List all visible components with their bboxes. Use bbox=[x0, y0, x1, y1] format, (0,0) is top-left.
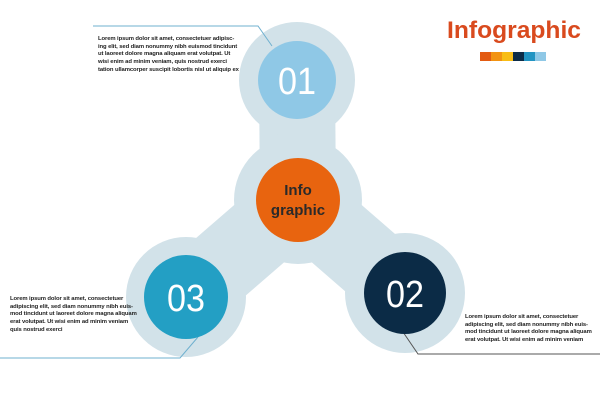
text block 03 bbox=[10, 296, 137, 333]
text block 03: erat volutpat. Ut wisi enim ad minim veniam bbox=[10, 319, 128, 325]
circle 03: 03 bbox=[167, 278, 205, 320]
text block 01: Lorem ipsum dolor sit amet, consectetuer adipisc- bbox=[98, 36, 234, 42]
center circle: graphic bbox=[271, 202, 325, 219]
text block 02: adipiscing elit, sed diam nonummy nibh euis- bbox=[465, 322, 588, 328]
text block 03: Lorem ipsum dolor sit amet, consectetuer bbox=[10, 296, 123, 302]
text block 03: adipiscing elit, sed diam nonummy nibh euis- bbox=[10, 304, 133, 310]
text block 01: wisi enim ad minim veniam, quis nostrud exerci bbox=[98, 59, 227, 65]
text block 02: erat volutpat. Ut wisi enim ad minim veniam bbox=[465, 337, 583, 343]
title: Infographic bbox=[447, 17, 581, 44]
center circle: Info bbox=[284, 182, 312, 199]
circle 02 bbox=[364, 252, 446, 334]
text block 02: mod tincidunt ut laoreet dolore magna aliquam bbox=[465, 329, 592, 335]
circle 01: 01 bbox=[278, 61, 316, 103]
text block 01: tation ullamcorper suscipit lobortis nisl ut aliquip ex bbox=[98, 67, 239, 73]
text block 01 bbox=[98, 36, 239, 73]
text block 01: ing elit, sed diam nonummy nibh euismod tincidunt bbox=[98, 44, 237, 50]
circle 02: 02 bbox=[386, 274, 424, 316]
text block 03: mod tincidunt ut laoreet dolore magna aliquam bbox=[10, 311, 137, 317]
center circle bbox=[256, 158, 340, 242]
circle 01 bbox=[258, 41, 336, 119]
circle 03 bbox=[144, 255, 228, 339]
color bar bbox=[480, 52, 546, 61]
text block 02 bbox=[465, 314, 592, 343]
text block 03: quis nostrud exerci bbox=[10, 327, 62, 333]
spinner body bbox=[126, 22, 465, 357]
text block 02: Lorem ipsum dolor sit amet, consectetuer bbox=[465, 314, 578, 320]
text block 01: ut laoreet dolore magna aliquam erat volutpat. Ut bbox=[98, 51, 230, 57]
